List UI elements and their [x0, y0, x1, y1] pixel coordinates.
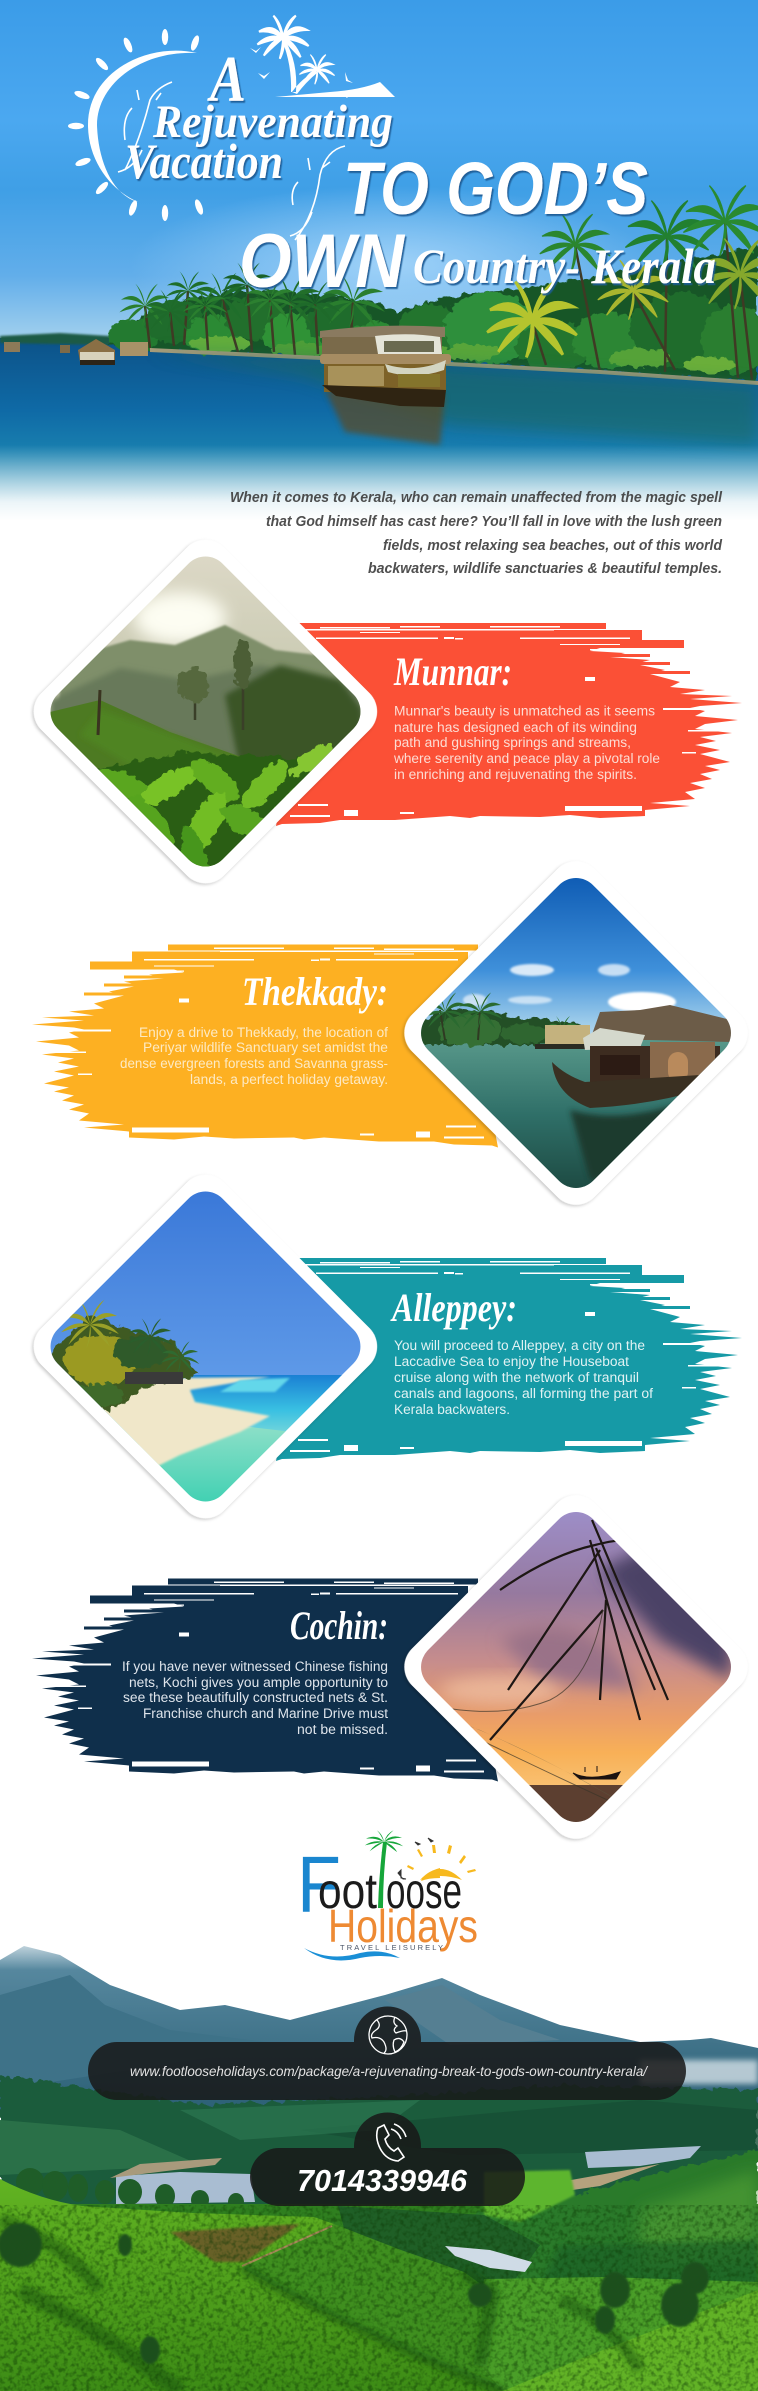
title bold lines [239, 147, 648, 304]
munnar text: nature has designed each of its winding [394, 720, 637, 735]
alleppey text: cruise along with the network of tranquil [394, 1370, 639, 1385]
diamond frame [394, 851, 758, 1215]
bar shape with icon tab [250, 2112, 525, 2206]
hero photo: kerala backwaters [0, 0, 758, 521]
munnar heading: Munnar: [393, 649, 512, 694]
reflection on water [150, 352, 758, 445]
sun emblem with rays [68, 29, 205, 221]
panel: alleppey [23, 1164, 742, 1529]
brush stroke [276, 623, 742, 826]
photo: houseboat [420, 877, 732, 1190]
tree row by lake [16, 2168, 244, 2211]
thekkady text: lands, a perfect holiday getaway. [190, 1072, 388, 1087]
logo wordmark: oose [386, 1863, 462, 1919]
munnar text [393, 704, 660, 782]
cochin text [122, 1659, 388, 1737]
intro text: backwaters, wildlife sanctuaries & beautiful temples. [368, 561, 722, 577]
munnar text: path and gushing springs and streams, [394, 735, 631, 750]
thekkady text: Enjoy a drive to Thekkady, the location of [139, 1025, 388, 1040]
thekkady text: dense evergreen forests and Savanna grass- [120, 1056, 388, 1071]
panel: munnar [23, 529, 742, 894]
phone bar [250, 2112, 525, 2206]
title bold lines: TO GOD’S [343, 147, 648, 230]
palm trees [119, 186, 758, 380]
cochin text: nets, Kochi gives you ample opportunity to [129, 1675, 388, 1690]
boat silhouette [573, 1766, 620, 1779]
icon: globe [369, 2016, 407, 2054]
alleppey text: Kerala backwaters. [394, 1402, 510, 1417]
panel: cochin [32, 1485, 758, 1849]
logo wordmark: Holidays [328, 1900, 478, 1952]
left hill [0, 2179, 503, 2391]
scattered bushes [0, 2223, 709, 2364]
palms [50, 1315, 200, 1410]
photo: beach [50, 1190, 362, 1505]
tree line [108, 246, 758, 382]
logo: footloose holidays [297, 1830, 478, 1960]
right lower hills [470, 2277, 758, 2391]
island palm emblem [250, 16, 395, 98]
back mountains [0, 1946, 758, 2110]
photo: tea hills [50, 556, 362, 887]
forest [0, 2075, 758, 2225]
bar shape with icon tab [88, 2006, 686, 2100]
distant boat [545, 1025, 590, 1044]
panel: thekkady [32, 851, 758, 1215]
fog [0, 1945, 758, 2035]
logo birds [398, 1838, 433, 1879]
sky [0, 0, 758, 345]
brush stroke [32, 944, 498, 1148]
cochin text: see these beautifully constructed nets & St. [123, 1690, 388, 1705]
cochin text: not be missed. [297, 1722, 388, 1737]
title country line: Country- Kerala [413, 238, 716, 294]
alleppey text: canals and lagoons, all forming the part of [394, 1386, 653, 1401]
intro text: that God himself has cast here? You’ll fall in love with the lush green [266, 514, 722, 530]
alleppey text [394, 1338, 653, 1417]
title script lines [125, 43, 393, 189]
logo palm [365, 1830, 403, 1908]
intro text [230, 490, 723, 577]
valley [338, 2206, 540, 2300]
website url: www.footlooseholidays.com/package/a-rejuvenating-break-to-gods-own-country-kerala/ [130, 2063, 649, 2079]
far shore [0, 333, 110, 345]
title [68, 16, 716, 304]
logo wordmark: F [297, 1840, 341, 1929]
net mesh [470, 1726, 612, 1797]
left lake [116, 2172, 255, 2204]
small houseboats [4, 339, 148, 365]
thekkady text [120, 1025, 388, 1087]
right mid hill [470, 2150, 758, 2310]
tea texture [0, 2205, 758, 2391]
water [0, 338, 758, 520]
munnar text: Munnar's beauty is unmatched as it seems [394, 704, 655, 718]
center hill [242, 2224, 503, 2391]
cochin text: Franchise church and Marine Drive must [143, 1706, 388, 1721]
logo sun [407, 1845, 476, 1881]
fade to white [0, 445, 758, 521]
munnar text: in enriching and rejuvenating the spirits. [394, 767, 637, 782]
net poles [489, 1520, 669, 1741]
intro text: fields, most relaxing sea beaches, out of this world [383, 538, 723, 554]
brush stroke [32, 1578, 498, 1782]
diamond frame [23, 529, 388, 894]
front mountain [0, 1975, 290, 2090]
title script lines: Vacation [125, 133, 283, 189]
right lake [585, 2146, 701, 2168]
icon: phone [377, 2124, 406, 2161]
logo wordmark [297, 1840, 478, 1952]
thekkady text: Periyar wildlife Sanctuary set amidst the [143, 1040, 388, 1055]
logo wordmark: TRAVEL LEISURELY [340, 1943, 444, 1952]
main houseboat [320, 326, 451, 445]
footer landscape photo [0, 1930, 758, 2391]
alleppey text: You will proceed to Alleppey, a city on the [394, 1338, 645, 1353]
shoreline [150, 348, 758, 385]
logo wordmark: oot [318, 1863, 377, 1919]
alleppey heading: Alleppey: [390, 1285, 517, 1330]
title script lines: A [207, 43, 246, 116]
photo: chinese fishing nets [420, 1511, 732, 1825]
base green [0, 2204, 758, 2391]
diamond frame [394, 1485, 758, 1849]
phone number: 7014339946 [297, 2163, 468, 2198]
boat [590, 1005, 731, 1042]
brush stroke [276, 1258, 742, 1461]
diamond frame [23, 1164, 388, 1529]
cochin text: If you have never witnessed Chinese fishing [122, 1659, 388, 1674]
brown patch and path [170, 2224, 300, 2262]
small lake [445, 2246, 532, 2272]
hill folds [0, 2220, 640, 2391]
munnar text: where serenity and peace play a pivotal role [393, 751, 660, 766]
title script lines: Rejuvenating [152, 96, 393, 148]
tea leaves [97, 742, 333, 866]
alleppey text: Laccadive Sea to enjoy the Houseboat [394, 1354, 629, 1369]
intro text: When it comes to Kerala, who can remain unaffected from the magic spell [230, 490, 723, 506]
title bold lines: OWN [239, 219, 406, 304]
thekkady heading: Thekkady: [242, 969, 388, 1014]
logo swoosh [304, 1948, 400, 1960]
flourishes [118, 82, 345, 240]
website bar [88, 2006, 686, 2100]
fade into white [0, 1930, 758, 1970]
cochin heading: Cochin: [290, 1603, 388, 1648]
